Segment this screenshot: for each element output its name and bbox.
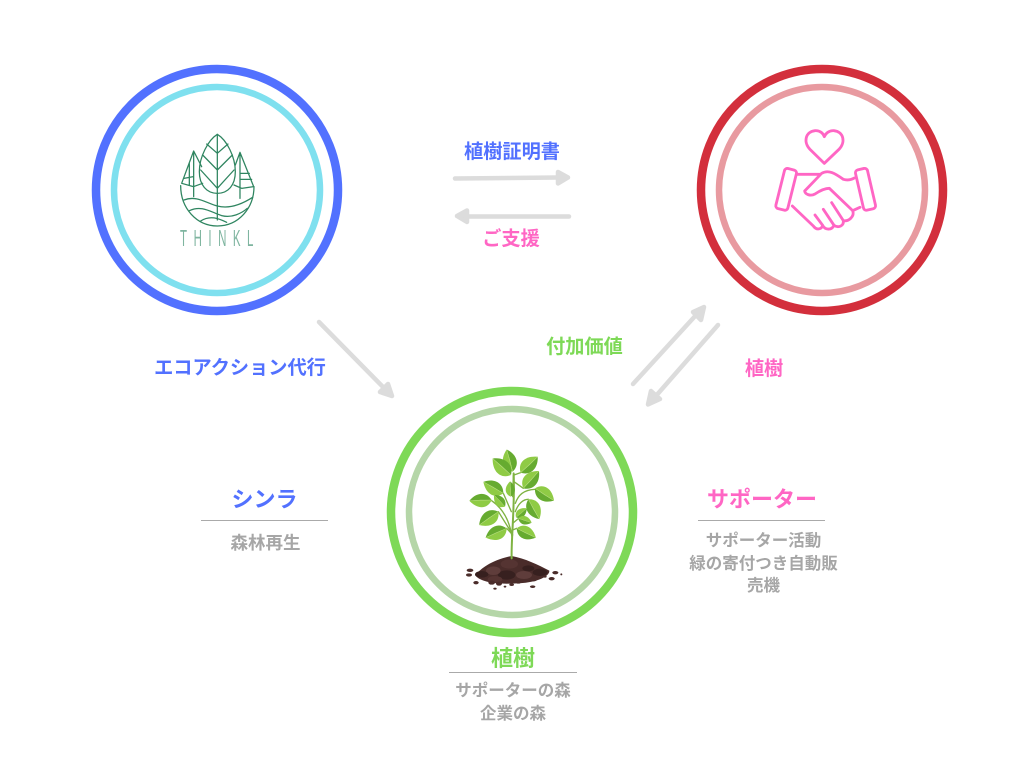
panel: shinra <box>230 486 300 552</box>
logo wordmark: THINKL <box>180 226 260 251</box>
text: forests <box>455 682 571 722</box>
label: added value: 付加価値 <box>546 337 623 358</box>
text: forest regeneration: 森林再生 <box>230 532 300 552</box>
circle: blue organisation <box>96 69 338 311</box>
circle: red supporter <box>701 69 943 311</box>
arrow: certificate to the right <box>455 172 568 184</box>
icon: plant in soil <box>466 448 562 590</box>
plant leaves <box>469 448 558 544</box>
text: supporter activities <box>689 532 838 595</box>
arrow: added value to supporter <box>633 307 704 384</box>
text: forests: 企業の森 <box>480 704 546 722</box>
label: certificate: 植樹証明書 <box>464 142 560 163</box>
icon: heart and handshake <box>775 131 876 229</box>
text: supporter activities: 売機 <box>747 577 780 595</box>
plant soil mound <box>466 556 562 590</box>
panel: supporter <box>689 486 838 595</box>
label: support: ご支援 <box>482 229 540 250</box>
circle: green planting <box>391 391 633 633</box>
label: eco action: エコアクション代行 <box>154 358 326 379</box>
label: planting arrow: 植樹 <box>745 358 783 380</box>
heading: supporter: サポーター <box>707 486 817 512</box>
arrow: eco action to planting <box>319 322 392 396</box>
text: supporter activities: サポーター活動 <box>706 532 821 550</box>
text: supporter activities: 緑の寄付つき自動販 <box>689 554 838 572</box>
arrow: planting from supporter <box>648 325 718 404</box>
text: forests: サポーターの森 <box>455 682 571 700</box>
heading: shinra: シンラ <box>231 486 298 512</box>
heading: planting: 植樹 <box>491 646 535 671</box>
arrow: support to the left <box>457 210 569 222</box>
panel: planting <box>455 646 571 722</box>
plant stem and branches <box>492 473 535 558</box>
icon: THINKL logo <box>181 134 254 226</box>
